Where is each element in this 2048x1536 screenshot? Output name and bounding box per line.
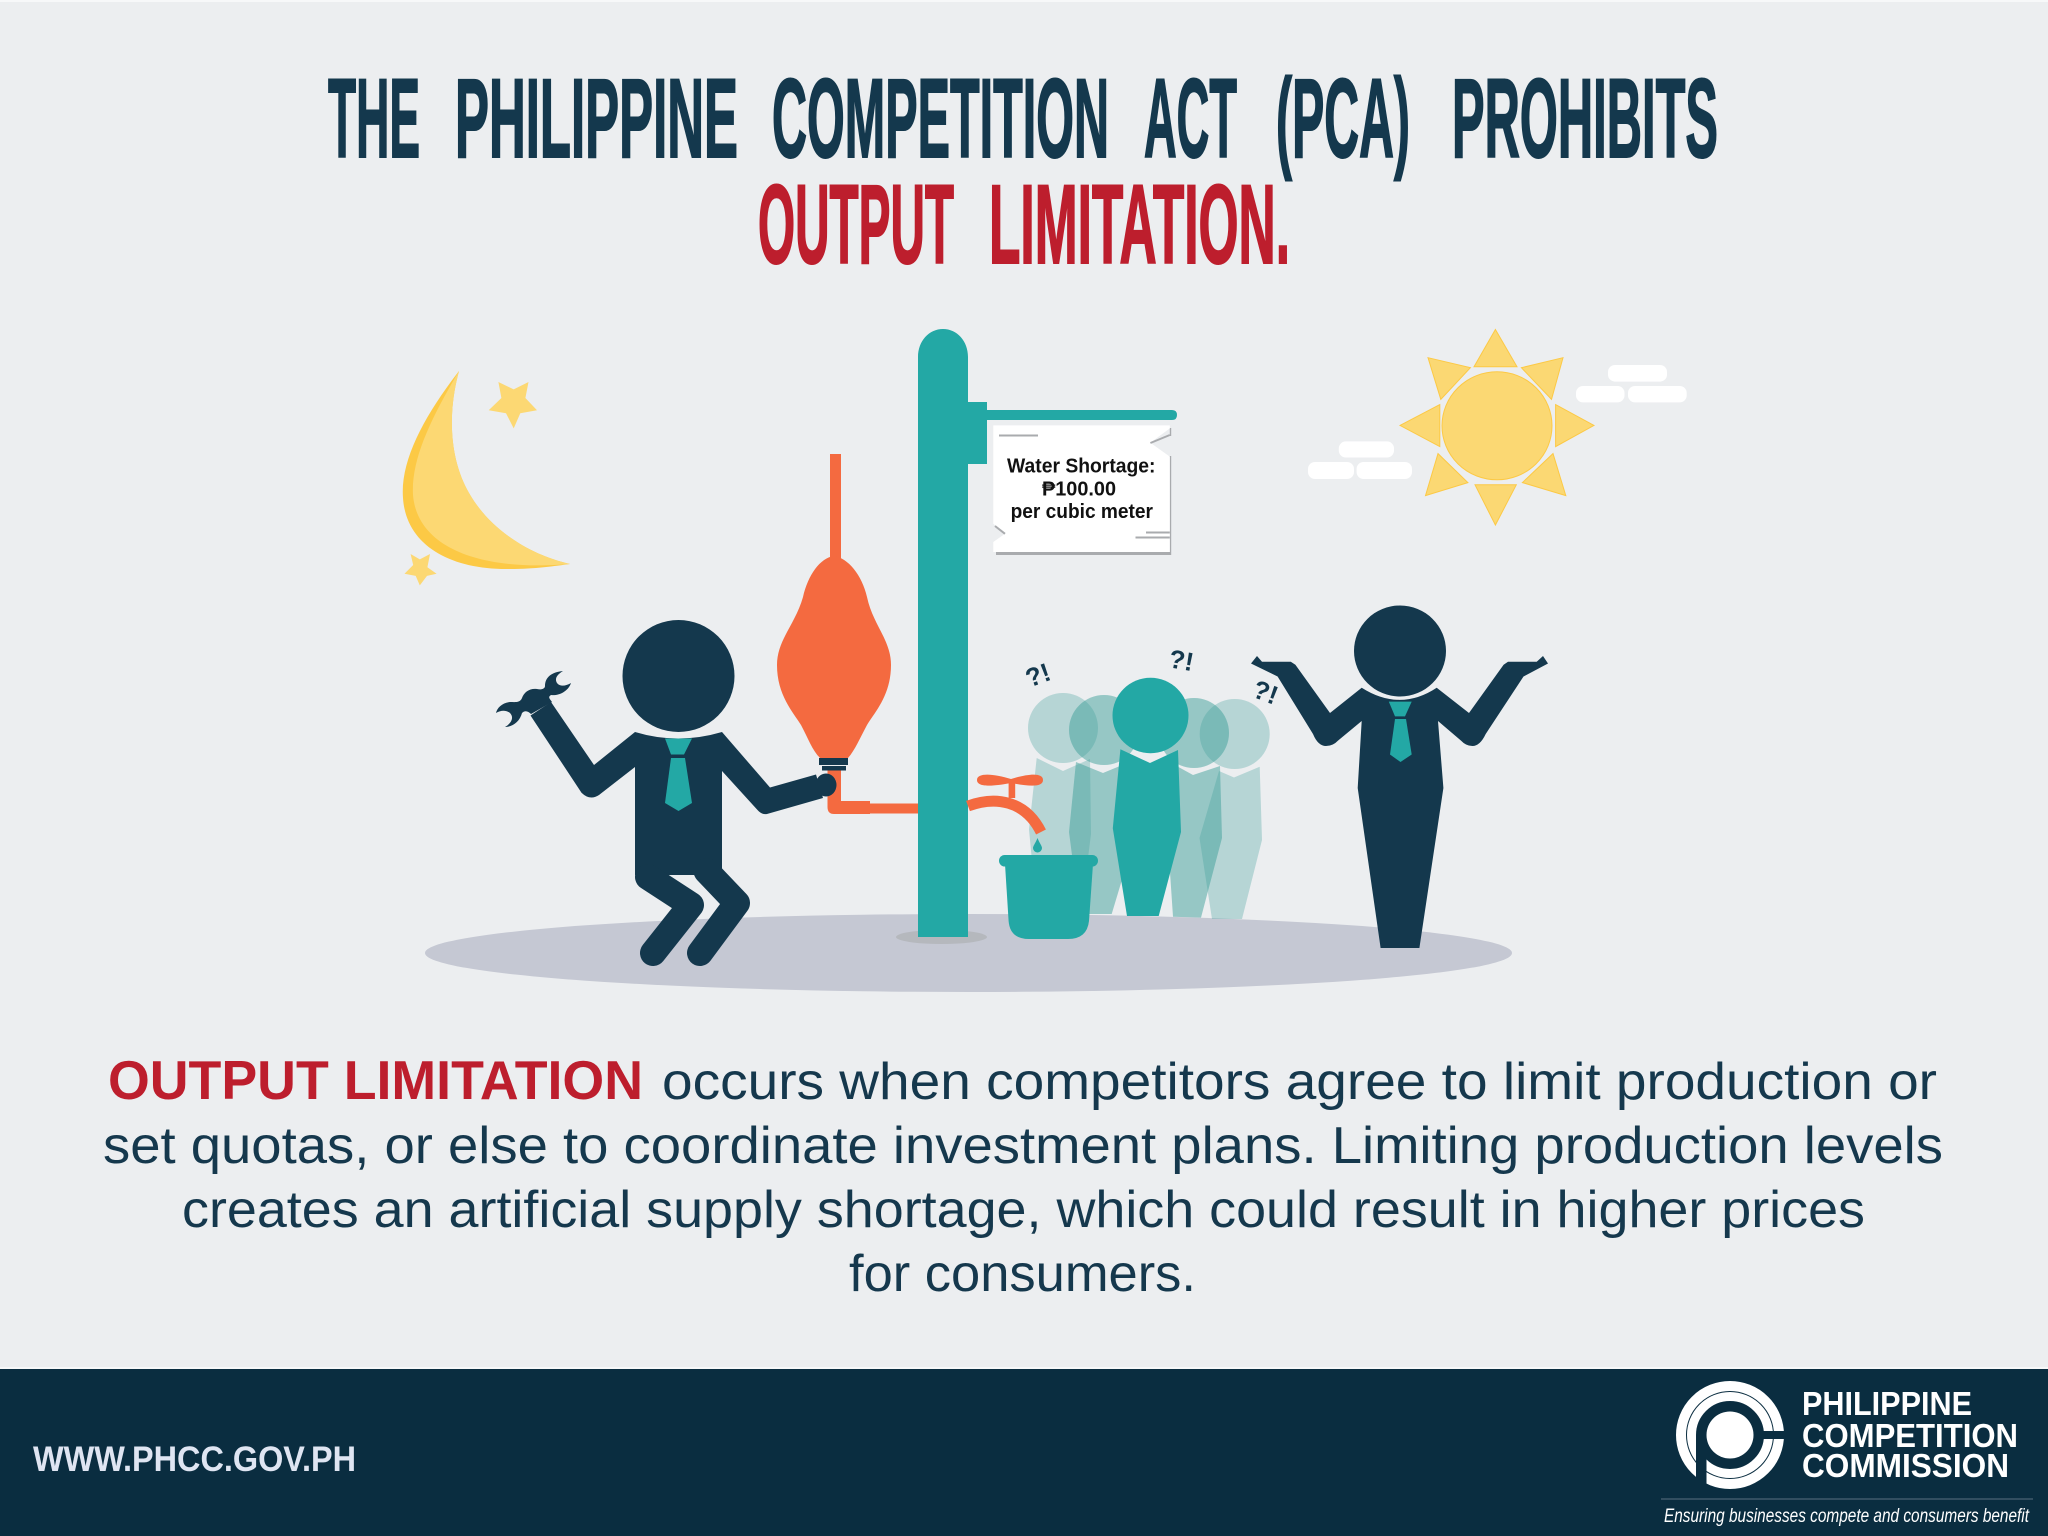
price sign [993, 425, 1171, 555]
confused marks: ?! [1249, 674, 1282, 710]
confused marks: ?! [1167, 643, 1196, 677]
title: PHILIPPINE [455, 56, 738, 181]
wrench [496, 671, 571, 727]
body text [103, 1049, 1943, 1303]
price sign: ₱100.00 [1042, 479, 1116, 501]
price sign: per cubic meter [1011, 501, 1153, 523]
title: COMPETITION [772, 56, 1109, 181]
title: LIMITATION. [989, 162, 1290, 287]
man shrugging [1251, 606, 1548, 948]
legs [648, 877, 691, 953]
consumer right middle [1159, 698, 1229, 918]
consumer front [1112, 678, 1188, 916]
man with wrench [496, 620, 836, 953]
body and arms [1251, 656, 1548, 948]
hand [816, 774, 836, 796]
footer bar [0, 1367, 2048, 1536]
body text: OUTPUT LIMITATION [108, 1049, 643, 1111]
icon: left cloud [1308, 441, 1412, 479]
title: ACT [1144, 56, 1237, 181]
title: (PCA) [1276, 56, 1410, 181]
signpost pole [918, 329, 1177, 937]
head [1354, 606, 1446, 696]
water drop [1033, 838, 1042, 852]
icon: crescent moon [403, 371, 570, 569]
title: THE [328, 56, 420, 181]
text: PROHIBITS [1452, 56, 1718, 181]
icon: sun [1400, 330, 1594, 525]
consumer left middle [1069, 695, 1139, 914]
torso and arms [530, 702, 823, 875]
body text: for consumers. [849, 1245, 1196, 1303]
icon: right cloud [1576, 365, 1687, 402]
confused marks: ?! [1021, 657, 1055, 693]
bucket [999, 855, 1098, 939]
body text: occurs when competitors agree to limit production or [662, 1053, 1937, 1111]
consumer far right [1200, 699, 1270, 919]
orange pipe and bulb [777, 454, 920, 814]
consumer far left [1028, 693, 1098, 914]
water tap [968, 775, 1043, 852]
organisation name: COMMISSION [1802, 1447, 2009, 1484]
icon: PCC logo [1681, 1386, 1790, 1491]
tie [1389, 702, 1412, 762]
organisation name: PHILIPPINE [1802, 1385, 1972, 1422]
head [622, 620, 734, 732]
title: OUTPUT [758, 162, 954, 287]
body text: set quotas, or else to coordinate investment plans. Limiting production levels [103, 1117, 1943, 1175]
website url: WWW.PHCC.GOV.PH [33, 1440, 356, 1479]
ground ellipse [425, 914, 1512, 992]
organisation name [1802, 1385, 2018, 1484]
title [328, 56, 1718, 287]
price sign: Water Shortage: [1007, 456, 1156, 478]
crowd of consumers [1028, 678, 1270, 919]
body text: creates an artificial supply shortage, which could result in higher prices [182, 1181, 1865, 1239]
tie [665, 738, 692, 811]
confused marks [1021, 643, 1282, 710]
icon: small star [404, 554, 437, 585]
organisation name: COMPETITION [1802, 1417, 2018, 1454]
pole shadow [896, 930, 987, 944]
icon: large star [489, 382, 537, 428]
